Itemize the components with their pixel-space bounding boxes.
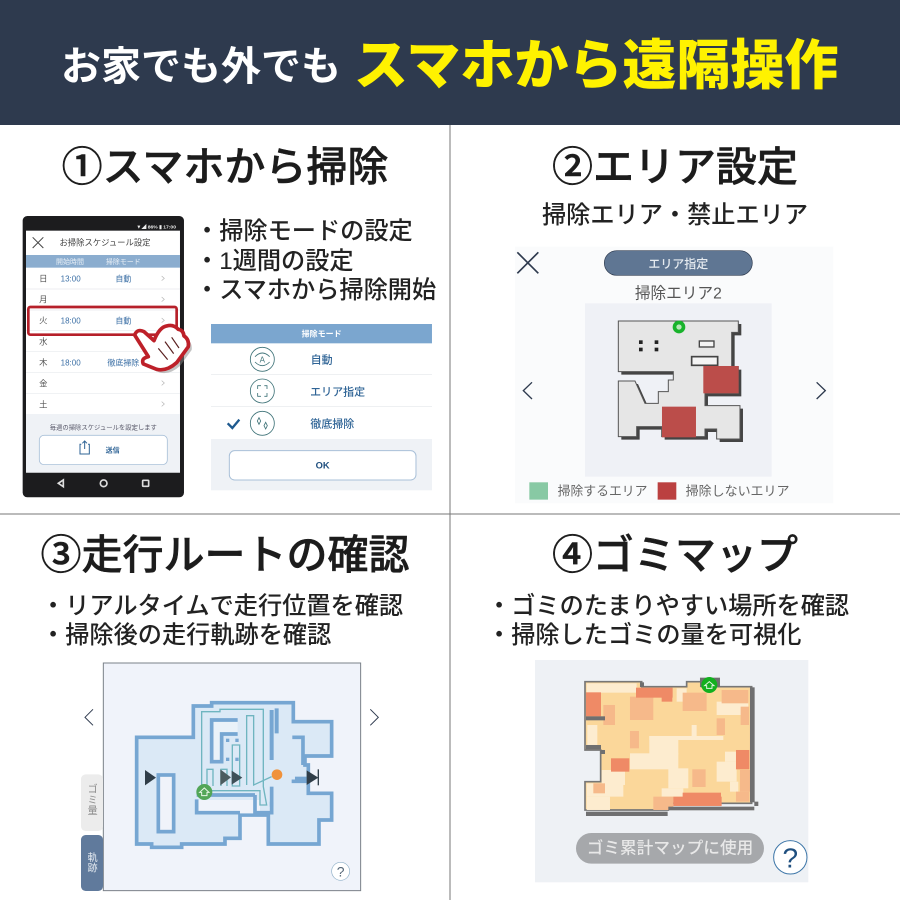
phone schedule screen: 日 bbox=[39, 274, 48, 284]
panel: dust map bbox=[487, 532, 849, 882]
phone schedule screen: 自動 bbox=[115, 274, 131, 284]
phone schedule screen bbox=[23, 216, 192, 497]
route map screen: 軌 bbox=[88, 851, 98, 864]
phone schedule screen: 18:00 bbox=[61, 358, 81, 367]
title: お家でも外でも bbox=[61, 45, 341, 89]
bullet list: dust bbox=[487, 593, 849, 649]
heading: smartphone cleaning: ①スマホから掃除 bbox=[62, 144, 388, 190]
phone schedule screen: 木 bbox=[39, 357, 48, 367]
phone schedule screen: 18:00 bbox=[61, 317, 81, 326]
title: スマホから遠隔操作 bbox=[354, 36, 838, 96]
phone schedule screen: 自動 bbox=[115, 316, 131, 326]
panel: smartphone cleaning bbox=[23, 144, 436, 497]
cleaning mode menu: A bbox=[260, 355, 266, 364]
phone schedule screen: 金 bbox=[39, 378, 48, 388]
area map screen bbox=[515, 247, 833, 503]
icon: help: ? bbox=[337, 864, 345, 880]
bullet list: cleaning features: ・1週間の設定 bbox=[195, 248, 354, 275]
phone schedule screen: 毎週の掃除スケジュールを設定します bbox=[50, 422, 157, 431]
cleaning mode menu: 徹底掃除 bbox=[310, 416, 354, 430]
heat map bbox=[585, 677, 758, 816]
bullet list: cleaning features: ・掃除モードの設定 bbox=[195, 218, 413, 245]
route map screen: ミ bbox=[88, 795, 98, 806]
icon: pointing hand bbox=[135, 325, 192, 373]
floor plan bbox=[618, 321, 743, 442]
bullet list: route: ・掃除後の走行軌跡を確認 bbox=[41, 622, 331, 649]
phone schedule screen: ▼◢ 86% ▮ 17:00 bbox=[136, 225, 176, 231]
bullet list: dust: ・掃除したゴミの量を可視化 bbox=[487, 622, 801, 649]
heading: route check: ③走行ルートの確認 bbox=[40, 532, 410, 578]
floor plan with route bbox=[137, 703, 332, 847]
icon: help: ? bbox=[783, 842, 798, 873]
selected row highlight bbox=[28, 307, 177, 335]
panel: route check bbox=[40, 532, 410, 891]
phone schedule screen: 徹底掃除 bbox=[107, 357, 139, 367]
route map screen: 量 bbox=[88, 805, 98, 817]
legend: 掃除しないエリア bbox=[686, 484, 790, 499]
route map screen bbox=[81, 663, 378, 891]
icon: help bbox=[774, 841, 807, 874]
phone schedule screen: 月 bbox=[39, 295, 48, 305]
route map screen: 跡 bbox=[88, 861, 98, 874]
phone schedule screen: 水 bbox=[39, 337, 48, 347]
bullet list: cleaning features: ・スマホから掃除開始 bbox=[195, 277, 436, 304]
bullet list: route: ・リアルタイムで走行位置を確認 bbox=[41, 593, 403, 620]
phone schedule screen: 土 bbox=[39, 399, 48, 409]
header banner bbox=[0, 0, 900, 125]
heading: area settings: ②エリア設定 bbox=[552, 144, 798, 190]
button bbox=[576, 833, 764, 864]
phone schedule screen: 火 bbox=[39, 316, 48, 326]
icon: home dock bbox=[196, 784, 212, 800]
area map screen: 掃除エリア2 bbox=[635, 284, 722, 302]
heading: dust map: ④ゴミマップ bbox=[552, 532, 798, 578]
phone schedule screen: 掃除モード bbox=[106, 257, 141, 266]
dust map screen bbox=[535, 660, 808, 882]
legend: 掃除するエリア bbox=[558, 484, 647, 499]
bullet list: cleaning features bbox=[195, 218, 436, 304]
route map screen: ゴ bbox=[88, 783, 98, 796]
phone schedule screen: お掃除スケジュール設定 bbox=[59, 237, 151, 247]
phone schedule screen: 送信 bbox=[106, 446, 120, 455]
icon: arrows bbox=[145, 769, 319, 785]
cleaning mode menu: 自動 bbox=[311, 353, 333, 367]
icon: robot position bbox=[272, 769, 282, 780]
cleaning mode menu: エリア指定 bbox=[310, 384, 365, 398]
bullet list: route bbox=[41, 593, 403, 649]
bullet list: dust: ・ゴミのたまりやすい場所を確認 bbox=[487, 593, 849, 620]
area map screen: エリア指定 bbox=[648, 256, 708, 271]
cleaning mode menu: OK bbox=[316, 461, 330, 471]
icon: help bbox=[332, 862, 350, 880]
phone schedule screen: 13:00 bbox=[61, 275, 81, 284]
button: ゴミ累計マップに使用 bbox=[587, 838, 753, 858]
cleaning mode menu bbox=[211, 324, 432, 490]
legend bbox=[529, 482, 790, 500]
subheading: 掃除エリア・禁止エリア bbox=[542, 202, 808, 229]
panel: area settings bbox=[515, 144, 833, 503]
phone schedule screen: 開始時間 bbox=[56, 257, 84, 266]
cleaning mode menu: 掃除モード bbox=[302, 329, 342, 339]
